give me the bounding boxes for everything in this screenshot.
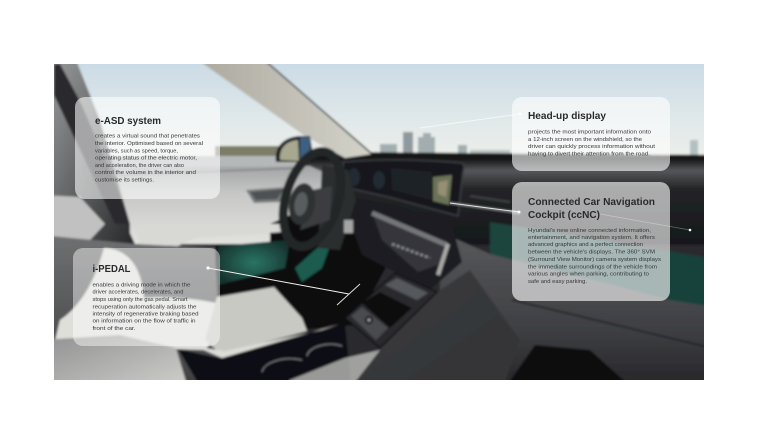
A-pillar bbox=[202, 64, 372, 160]
cup holders bbox=[262, 344, 342, 372]
black lower footwell bbox=[510, 344, 624, 380]
roadside horizon in side window bbox=[215, 146, 285, 158]
city skyline bbox=[380, 132, 698, 156]
heading: e-ASD system: e-ASD system bbox=[95, 116, 161, 127]
text block: e-ASD description: customise its settings. bbox=[95, 178, 154, 184]
panel: e-ASD system bbox=[75, 97, 220, 199]
door panel bbox=[100, 166, 340, 244]
text block: i-PEDAL description bbox=[92, 282, 198, 332]
text block: i-PEDAL description: stops using only the gas pedal. Smart bbox=[92, 297, 188, 303]
text block: i-PEDAL description: driver accelerates, decelerates, and bbox=[92, 290, 184, 296]
console front bevel bbox=[287, 348, 381, 380]
steering column bbox=[318, 165, 356, 250]
text block: head-up description: projects the most important information onto bbox=[528, 130, 651, 136]
base interior tone bbox=[128, 233, 704, 380]
text block: ccNC description: between the vehicle's displays. The 360° SVM bbox=[528, 250, 655, 256]
heading: connected car navigation cockpit: Connected Car Navigation bbox=[528, 197, 655, 208]
text block: e-ASD description bbox=[95, 134, 203, 184]
lower door ledge bbox=[135, 224, 282, 246]
panel: i-PEDAL bbox=[73, 248, 220, 346]
text block: ccNC description: Hyundai's new online connected information, bbox=[528, 228, 651, 234]
heading: connected car navigation cockpit: Cockpit (ccNC) bbox=[528, 210, 600, 221]
text block: e-ASD description: operating status of the electric motor, bbox=[95, 156, 197, 162]
panel: head-up display bbox=[512, 97, 670, 171]
text block: e-ASD description: the interior. Optimised based on several bbox=[95, 141, 203, 147]
white seat bolster bbox=[54, 248, 222, 350]
sky through windows bbox=[77, 64, 704, 158]
text block: e-ASD description: control the volume in the interior and bbox=[95, 170, 196, 176]
arrow: i-PEDAL leader bbox=[206, 266, 360, 305]
side mirror bbox=[276, 136, 314, 162]
text block: ccNC description: advanced graphics and a perfect connection bbox=[528, 242, 643, 248]
text block: ccNC description bbox=[528, 228, 661, 285]
door handle bbox=[246, 187, 288, 203]
left seat and rear area bbox=[54, 238, 219, 380]
panel: connected car navigation cockpit bbox=[512, 182, 670, 301]
text block: ccNC description: entertainment, and navigation system. It offers bbox=[528, 235, 655, 241]
heading: connected car navigation cockpit bbox=[528, 197, 655, 221]
car interior photo bbox=[54, 64, 704, 380]
console control unit bbox=[345, 273, 437, 348]
text block: e-ASD description: creates a virtual sound that penetrates bbox=[95, 134, 200, 140]
glovebox panel bbox=[439, 238, 704, 380]
tunnel side bbox=[358, 270, 514, 380]
display screen bbox=[343, 160, 464, 216]
seat cushion bbox=[205, 287, 307, 354]
arrow: ccNC leader bbox=[450, 203, 691, 231]
text block: ccNC description: the immediate surroundings of the vehicle from bbox=[528, 264, 657, 270]
dashboard bbox=[300, 152, 720, 245]
text block: ccNC description: safe and easy parking. bbox=[528, 279, 587, 285]
left pillar and dark interior bbox=[54, 64, 132, 241]
text block: i-PEDAL description: on information on the flow of traffic in bbox=[92, 319, 196, 325]
arrow: head-up display leader bbox=[420, 113, 521, 128]
centre console base bbox=[178, 323, 348, 380]
text block: ccNC description: various angles when parking, contributing to bbox=[528, 272, 649, 278]
text block: head-up description: driver can quickly process information without bbox=[528, 144, 655, 150]
dark footwell bbox=[215, 214, 386, 330]
ambient teal strip bbox=[490, 222, 720, 308]
text block: i-PEDAL description: front of the car. bbox=[92, 326, 136, 332]
heading: i-PEDAL: i-PEDAL bbox=[92, 264, 130, 275]
vent trim bbox=[450, 203, 520, 213]
text block: head-up description: a 12-inch screen on the windshield, so the bbox=[528, 137, 642, 143]
climate panel bbox=[374, 218, 444, 272]
text block: e-ASD description: variables, such as speed, torque, bbox=[95, 148, 178, 154]
heading: head-up display: Head-up display bbox=[528, 111, 606, 122]
centre stack bbox=[350, 206, 462, 288]
teal footwell light bbox=[218, 240, 290, 285]
text block: i-PEDAL description: enables a driving mode in which the bbox=[92, 282, 190, 288]
steering wheel bbox=[277, 146, 345, 252]
text block: head-up description: having to divert their attention from the road. bbox=[528, 151, 650, 157]
text block: i-PEDAL description: recuperation automatically adjusts the bbox=[92, 304, 196, 310]
text block: i-PEDAL description: intensity of regenerative braking based bbox=[92, 311, 198, 317]
text block: head-up description bbox=[528, 130, 655, 157]
text block: ccNC description: (Surround View Monitor) camera system displays bbox=[528, 257, 661, 263]
text block: e-ASD description: and acceleration, the driver can also bbox=[95, 163, 184, 169]
